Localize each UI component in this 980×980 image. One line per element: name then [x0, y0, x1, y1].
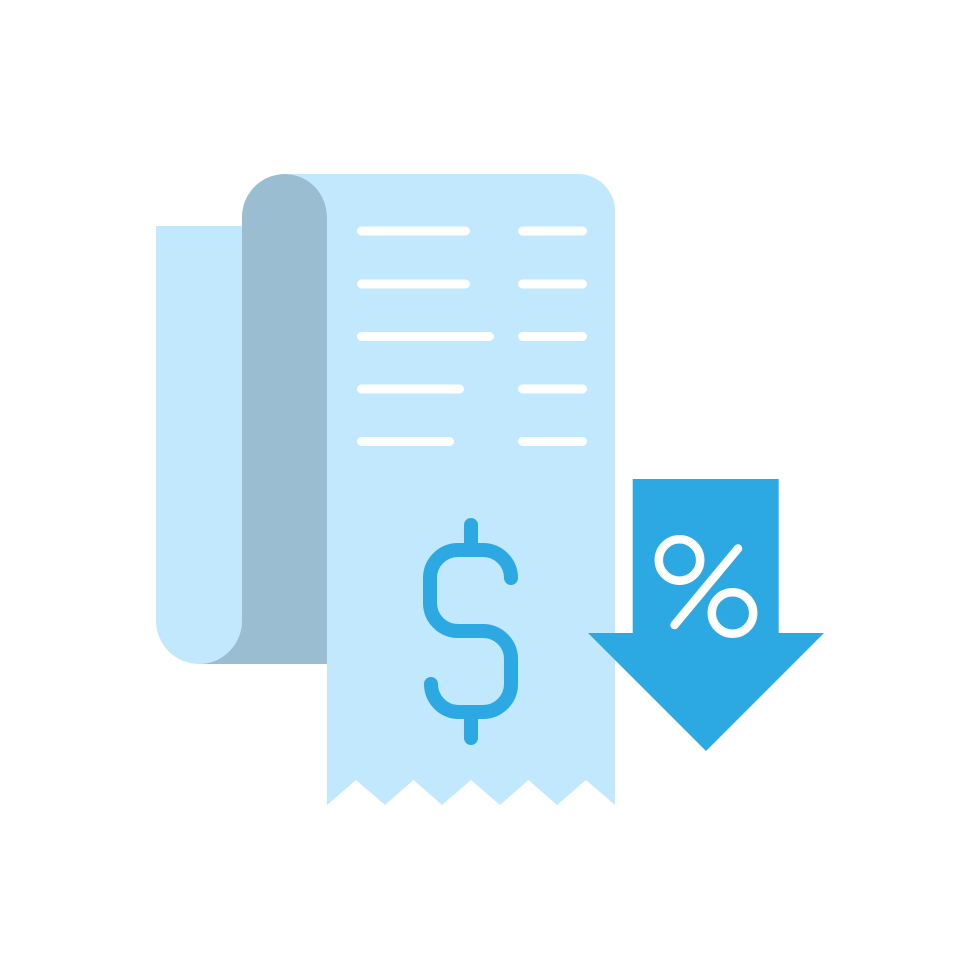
- icon: dollar sign: [430, 525, 511, 738]
- receipt front sheet: [285, 174, 615, 805]
- receipt roll shadow: [199, 174, 327, 664]
- receipt back flap: [156, 226, 242, 664]
- receipt item lines: [362, 231, 582, 442]
- arrow shape: [588, 479, 824, 751]
- percent symbol: [659, 539, 753, 634]
- icon: down arrow with percent: [588, 479, 824, 751]
- icon: receipt: [156, 174, 615, 805]
